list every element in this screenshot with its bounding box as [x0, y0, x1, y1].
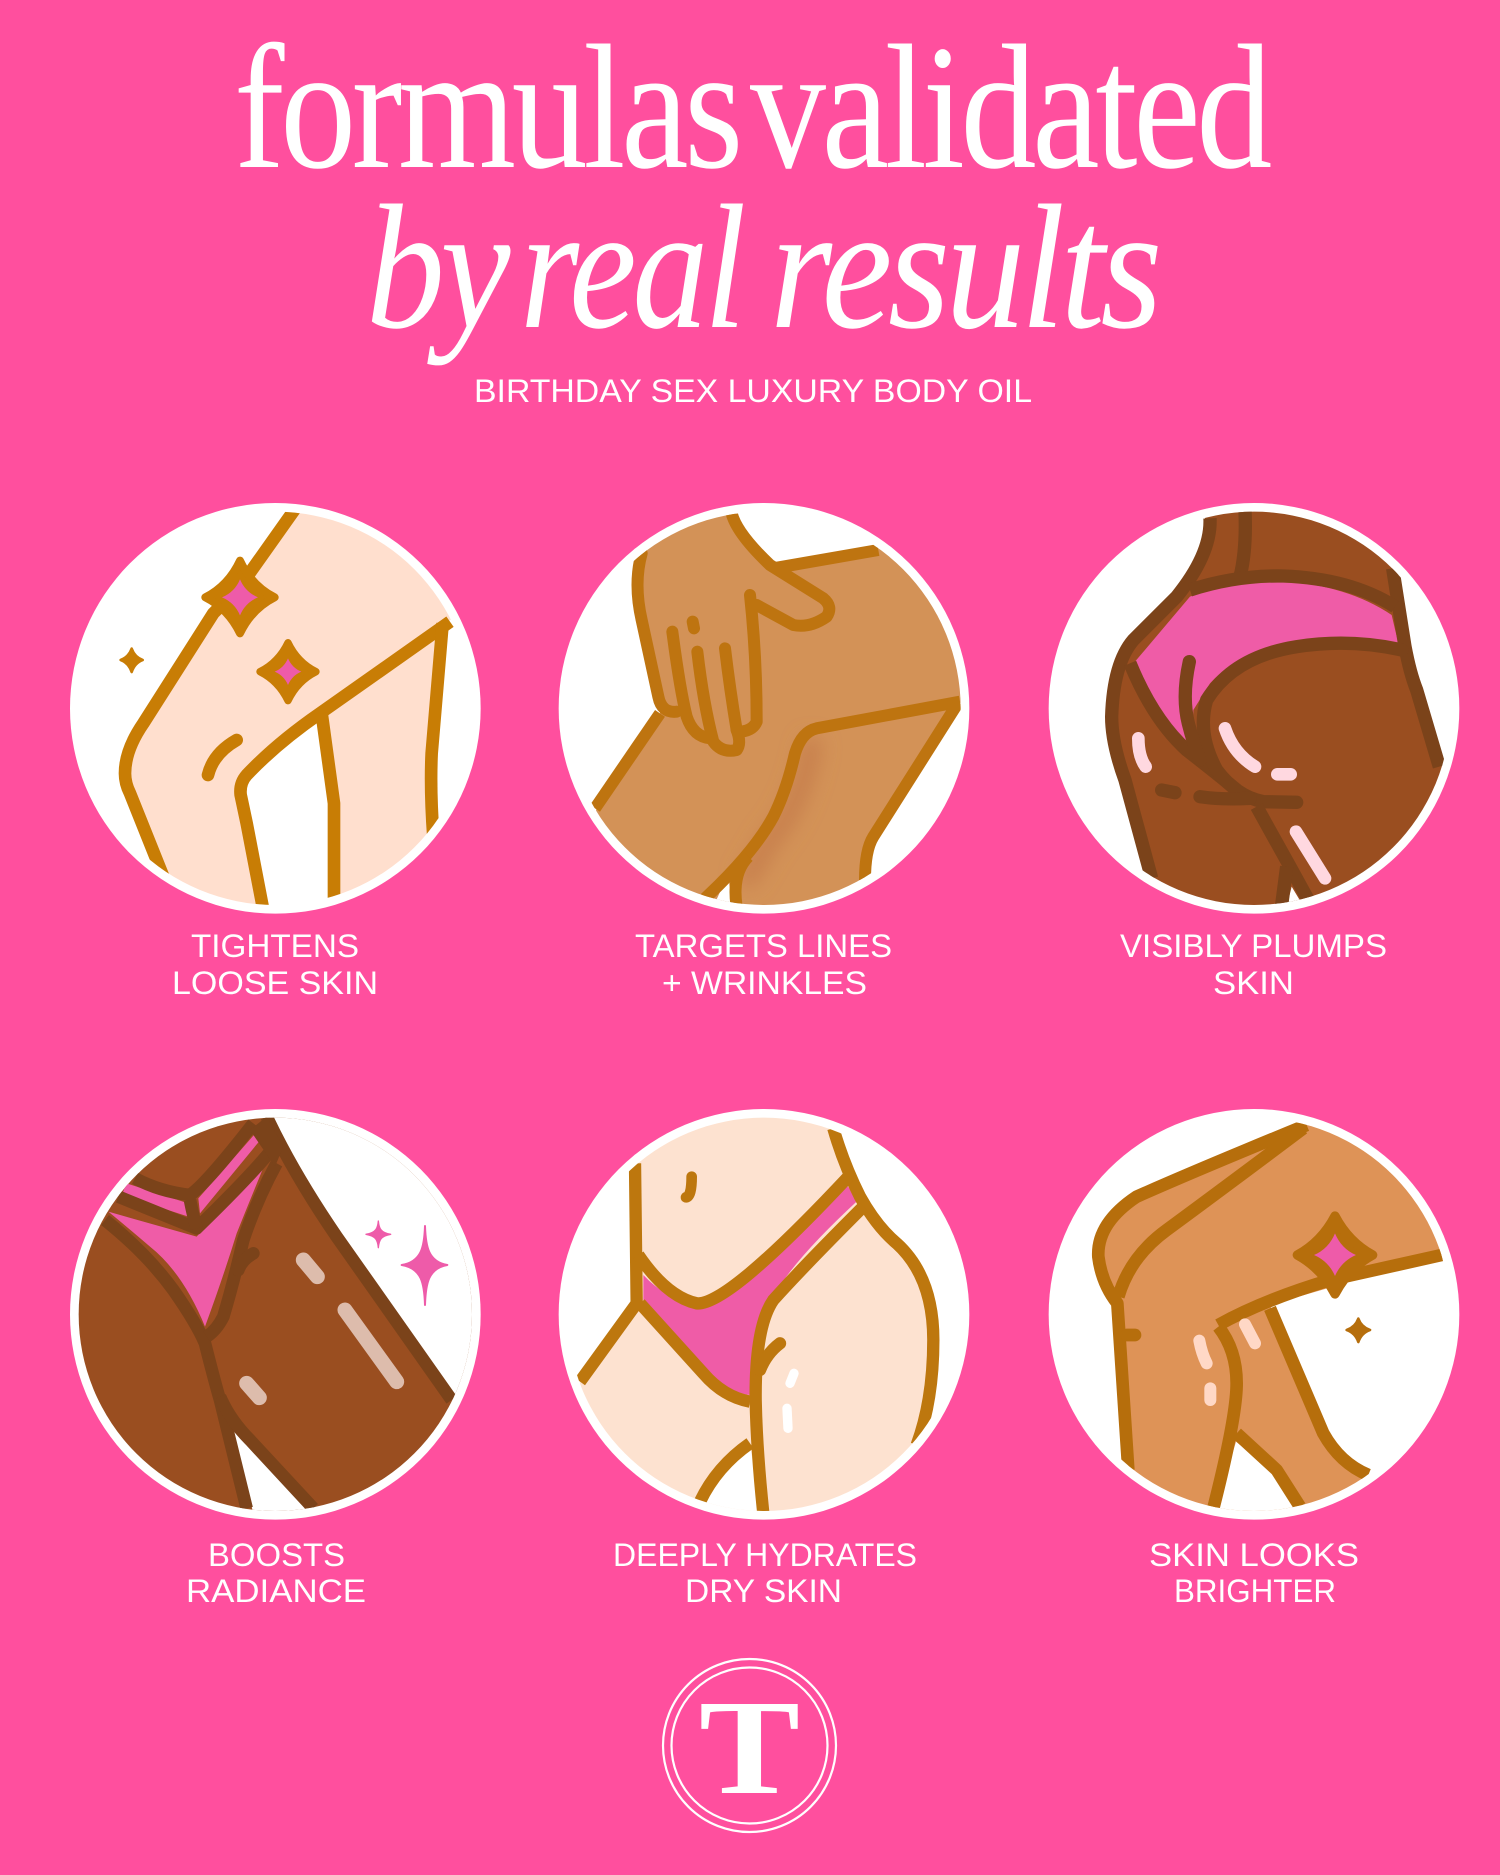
- label: SKIN LOOKS: [1149, 1537, 1359, 1573]
- panel: tightens loose skin: [70, 503, 481, 994]
- label: RADIANCE: [186, 1573, 366, 1609]
- label: DRY SKIN: [685, 1573, 842, 1609]
- title: [234, 8, 1271, 366]
- logo: T monogram: T: [699, 1673, 800, 1823]
- sparkle large: [205, 561, 275, 633]
- sparkle small: [1347, 1319, 1370, 1342]
- label: [1149, 1537, 1359, 1609]
- label: [1120, 928, 1387, 1001]
- title line two, italic: results: [770, 168, 1158, 366]
- icon: hip with sparkles: [70, 503, 481, 914]
- label: VISIBLY PLUMPS: [1120, 928, 1387, 964]
- panel: visibly plumps skin: [1048, 503, 1460, 994]
- title line two, italic: by: [366, 168, 511, 366]
- label: BOOSTS: [208, 1537, 345, 1573]
- sparkles: [366, 1221, 391, 1248]
- title line two, italic: real: [520, 168, 743, 366]
- label: DEEPLY HYDRATES: [613, 1537, 917, 1573]
- icon: bent knee with sparkles: [1048, 1109, 1460, 1520]
- label: [613, 1537, 917, 1609]
- title line one: validated: [750, 8, 1271, 206]
- label: [186, 1537, 366, 1609]
- sparkle medium: [260, 643, 316, 701]
- label: BRIGHTER: [1174, 1573, 1336, 1609]
- label: + WRINKLES: [662, 965, 867, 1001]
- panel: deeply hydrates dry skin: [559, 1107, 969, 1609]
- icon: buttocks with pink underwear: [1048, 503, 1460, 914]
- panel: skin looks brighter: [1048, 1109, 1460, 1602]
- label: [172, 928, 378, 1001]
- subtitle: BIRTHDAY SEX LUXURY BODY OIL: [474, 373, 1032, 409]
- label: SKIN: [1213, 965, 1294, 1001]
- sparkle small: [121, 649, 143, 672]
- label: [635, 928, 892, 1001]
- panel: boosts radiance: [70, 1109, 481, 1602]
- label: TIGHTENS: [191, 928, 359, 964]
- title line one: formulas: [234, 8, 739, 206]
- label: TARGETS LINES: [635, 928, 892, 964]
- label: LOOSE SKIN: [172, 965, 378, 1001]
- icon: hips with pink bikini: [558, 1109, 970, 1520]
- icon: thigh with sparkles and highlights: [70, 1109, 481, 1520]
- icon: hand on thigh: [558, 503, 970, 914]
- sparkle large: [1297, 1216, 1373, 1294]
- logo: T monogram: [663, 1659, 836, 1832]
- panel: targets lines and wrinkles: [558, 503, 970, 994]
